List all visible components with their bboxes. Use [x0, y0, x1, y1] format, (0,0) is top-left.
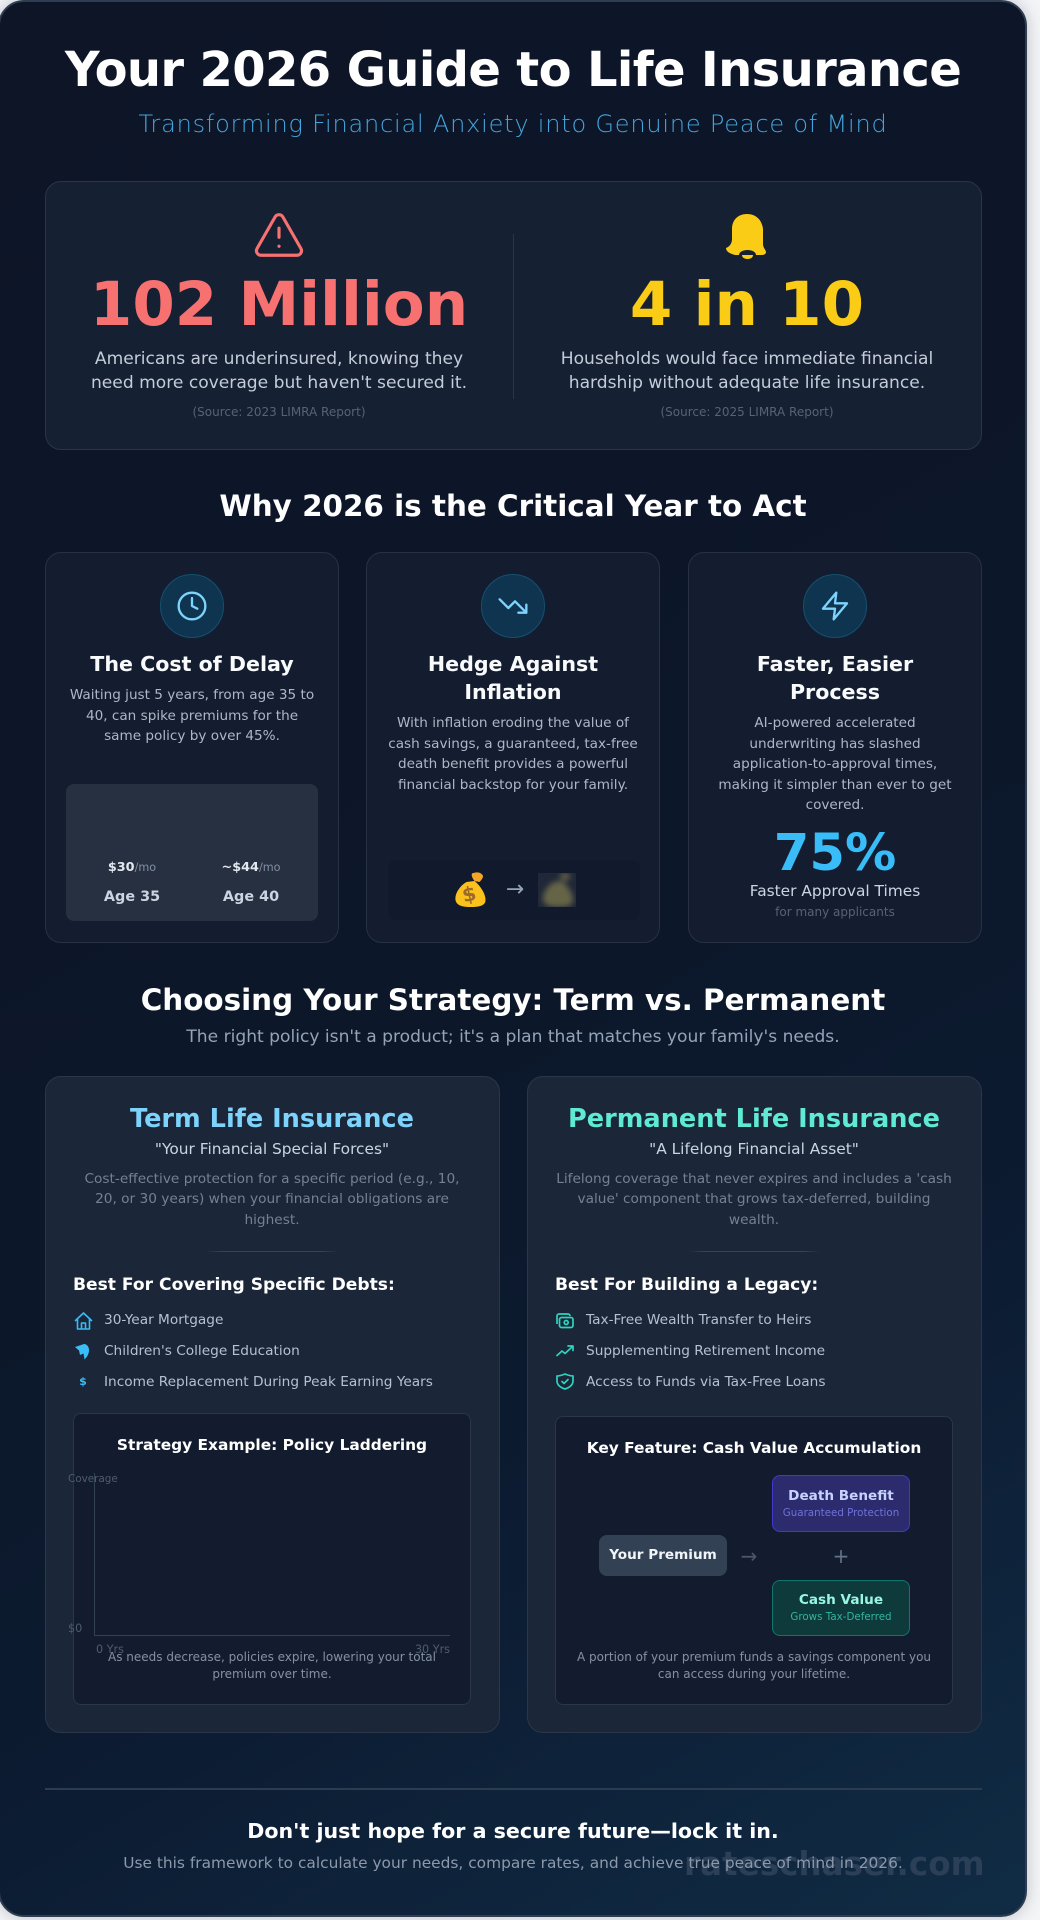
panel: key statistics [45, 181, 982, 450]
term description: 20, or 30 years) when your financial obligations are [95, 1191, 449, 1207]
chart: policy laddering axes: 30 Yrs [415, 1643, 450, 1656]
card text: cost of delay: 40, can spike premiums for the [86, 708, 298, 724]
card text: hedge against inflation: With inflation eroding the value of [397, 715, 629, 731]
icon: graduation [75, 1344, 89, 1360]
title: Your 2026 Guide to Life Insurance [65, 42, 961, 98]
death benefit sublabel: Guaranteed Protection [783, 1507, 899, 1519]
card title: faster easier process [757, 652, 914, 704]
icon: money bag: $ [460, 881, 478, 907]
cash value note: A portion of your premium funds a savings component you [577, 1650, 931, 1664]
panel: faster easier process [688, 552, 982, 943]
statistic description: underinsured: Americans are underinsured, knowing they [95, 349, 463, 369]
icon: banknotes [556, 1313, 574, 1328]
term description: highest. [244, 1212, 300, 1228]
card text: cost of delay: Waiting just 5 years, from age 35 to [70, 687, 314, 703]
statistic description: underinsured: need more coverage but haven't secured it. [91, 373, 467, 393]
cash value note [577, 1650, 931, 1681]
death benefit label: Death Benefit [788, 1488, 894, 1504]
statistic: 102 Million: 102 Million [90, 269, 468, 340]
watermark: rateschaser.com [684, 1845, 985, 1883]
policy laddering note: As needs decrease, policies expire, lowering your total [108, 1650, 436, 1664]
divider between statistics [513, 234, 514, 399]
card text: faster easier process: application-to-approval times, [733, 756, 937, 772]
icon: dollar: $ [79, 1375, 87, 1388]
card text: faster easier process: covered. [806, 797, 864, 813]
permanent tagline: "A Lifelong Financial Asset" [649, 1140, 859, 1158]
card title: hedge against inflation [428, 652, 598, 704]
card text: faster easier process: underwriting has slashed [749, 736, 921, 752]
chart: policy laddering axes: 0 Yrs [96, 1643, 124, 1656]
source: 2023 LIMRA: (Source: 2023 LIMRA Report) [192, 405, 366, 419]
statistic description: hardship: Households would face immediate financial [561, 349, 933, 369]
card text: faster easier process: AI-powered accelerated [754, 715, 916, 731]
permanent best-for heading: Best For Building a Legacy: [555, 1275, 818, 1295]
source: 2025 LIMRA: (Source: 2025 LIMRA Report) [660, 405, 834, 419]
icon: house [74, 1312, 92, 1330]
flow box: your premium: Your Premium [609, 1547, 717, 1563]
cash value title: Key Feature: Cash Value Accumulation [587, 1439, 921, 1457]
card text: hedge against inflation: cash savings, a guaranteed, tax-free [388, 736, 638, 752]
flow box: cash value [772, 1580, 910, 1636]
card text: hedge against inflation: death benefit provides a powerful [398, 756, 628, 772]
subtitle: Transforming Financial Anxiety into Genuine Peace of Mind [138, 110, 888, 138]
card text: cost of delay [70, 687, 314, 744]
footer heading: Don't just hope for a secure future—lock it in. [247, 1819, 779, 1843]
icon: trending up [556, 1345, 574, 1356]
term best-for heading: Best For Covering Specific Debts: [73, 1275, 395, 1295]
cash value label: Cash Value [799, 1592, 883, 1608]
icon: warning triangle [254, 213, 304, 257]
icon: trending down [481, 574, 545, 638]
policy laddering title: Strategy Example: Policy Laddering [117, 1436, 427, 1454]
price: age 35: $30/mo [108, 860, 156, 875]
statistic: 75%: 75% [774, 823, 896, 883]
permanent description [556, 1171, 952, 1228]
panel: term life insurance [45, 1076, 500, 1733]
policy laddering note [108, 1650, 436, 1681]
term title: Term Life Insurance [130, 1104, 414, 1134]
card text: hedge against inflation: financial backstop for your family. [398, 776, 628, 792]
icon: shield check [556, 1373, 574, 1390]
statistic note: applicants: for many applicants [775, 905, 895, 919]
card title: faster easier process: Process [790, 680, 880, 704]
icon: lightning bolt [803, 574, 867, 638]
graphic: shrinking money [388, 860, 640, 920]
panel: permanent life insurance [527, 1076, 982, 1733]
list item: retirement income: Supplementing Retirement Income [586, 1343, 825, 1359]
term tagline: "Your Financial Special Forces" [155, 1140, 389, 1158]
flow box: death benefit [772, 1475, 910, 1532]
permanent title: Permanent Life Insurance [568, 1104, 940, 1134]
permanent description: Lifelong coverage that never expires and includes a 'cash [556, 1171, 952, 1187]
arrow: → [506, 877, 524, 902]
flow arrow: → [741, 1544, 757, 1568]
card title: cost of delay: The Cost of Delay [90, 652, 294, 676]
plus sign: + [833, 1544, 849, 1568]
footer text: Use this framework to calculate your needs, compare rates, and achieve true peace of mind in 2026. [123, 1854, 903, 1872]
permanent description: wealth. [729, 1212, 779, 1228]
price: age 40: ~$44/mo [222, 860, 280, 875]
statistic description: underinsured [91, 349, 467, 393]
panel: policy laddering [73, 1413, 471, 1705]
list item: mortgage: 30-Year Mortgage [104, 1312, 223, 1328]
cash value sublabel: Grows Tax-Deferred [790, 1611, 892, 1623]
icon: clock [160, 574, 224, 638]
card text: cost of delay: same policy by over 45%. [104, 728, 280, 744]
card text: faster easier process [718, 715, 952, 813]
list item: tax-free loans: Access to Funds via Tax-Free Loans [586, 1374, 825, 1390]
flow box: your premium [599, 1535, 727, 1576]
term description [84, 1171, 460, 1228]
panel: cost of delay [45, 552, 339, 943]
heading: why 2026: Why 2026 is the Critical Year to Act [219, 489, 807, 523]
list item: income: Income Replacement During Peak Earning Years [104, 1374, 433, 1390]
list item: wealth transfer: Tax-Free Wealth Transfer to Heirs [586, 1312, 811, 1328]
statistic description: hardship: hardship without adequate life insurance. [569, 373, 925, 393]
term description: Cost-effective protection for a specific period (e.g., 10, [84, 1171, 460, 1187]
permanent description: value' component that grows tax-deferred, building [578, 1191, 930, 1207]
card text: faster easier process: making it simpler than ever to get [718, 776, 952, 792]
chart: premium by age [66, 784, 318, 921]
label: age 35: Age 35 [104, 889, 160, 905]
card title: faster easier process: Faster, Easier [757, 652, 913, 676]
icon: blurred money bag [538, 873, 576, 907]
list item: college: Children's College Education [104, 1343, 300, 1359]
policy laddering note: premium over time. [212, 1667, 332, 1681]
heading: choosing your strategy: Choosing Your Strategy: Term vs. Permanent [141, 983, 885, 1017]
panel: cash value accumulation [555, 1416, 953, 1705]
panel: hedge against inflation [366, 552, 660, 943]
chart: policy laddering axes: $0 [68, 1622, 82, 1635]
icon: bell [726, 214, 766, 259]
label: age 40: Age 40 [223, 889, 279, 905]
card title: hedge against inflation: Inflation [464, 680, 562, 704]
statistic description: hardship [561, 349, 933, 393]
chart: policy laddering axes [68, 1473, 450, 1656]
icon: money bag [455, 872, 486, 907]
statistic: 4 in 10: 4 in 10 [630, 269, 864, 340]
chart: policy laddering axes: Coverage [68, 1473, 118, 1485]
subheading: strategy: The right policy isn't a product; it's a plan that matches your family's needs. [186, 1027, 840, 1047]
cash value note: can access during your lifetime. [658, 1667, 850, 1681]
card text: hedge against inflation [388, 715, 638, 792]
card title: hedge against inflation: Hedge Against [428, 652, 598, 676]
statistic label: faster approval: Faster Approval Times [750, 882, 920, 900]
